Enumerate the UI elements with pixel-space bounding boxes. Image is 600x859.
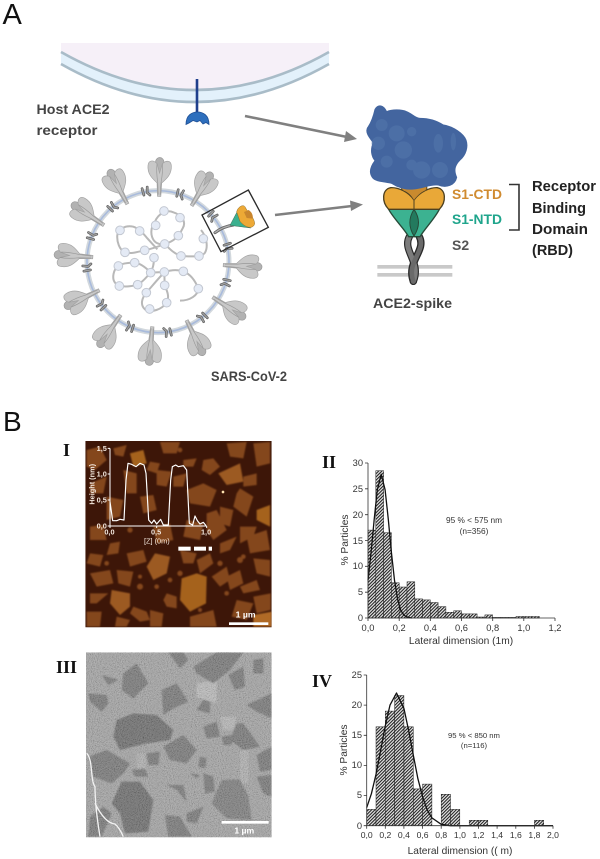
arrow: virus to spike bbox=[275, 200, 363, 215]
inset axis labels: 0,0 bbox=[104, 527, 115, 536]
inset height profile axes bbox=[108, 448, 207, 528]
x axis values: 0,2 bbox=[379, 830, 391, 840]
label: Receptor Binding Domain (RBD): Receptor bbox=[532, 178, 596, 195]
label: ACE2-spike: ACE2-spike bbox=[373, 295, 452, 311]
x axis values: 1,2 bbox=[549, 623, 561, 633]
membrane proteins bbox=[83, 187, 232, 337]
label: host ACE2 receptor bbox=[36, 101, 110, 138]
gaussian fit curve bbox=[367, 693, 553, 826]
scale bar: 1 µm bbox=[234, 826, 255, 836]
scale bar: 1 µm bbox=[236, 609, 256, 619]
panel III: electron microscopy image bbox=[86, 652, 272, 837]
annotation: (n=356) bbox=[460, 526, 489, 536]
x axis values: 0,8 bbox=[486, 623, 499, 633]
inset axis labels: 0,5 bbox=[151, 527, 161, 536]
label IV: IV bbox=[312, 671, 332, 691]
annotation bbox=[448, 731, 500, 750]
annotation: 95 % < 850 nm bbox=[448, 731, 500, 740]
y axis values: 15 bbox=[353, 536, 363, 546]
x axis values: 1,4 bbox=[491, 830, 503, 840]
domain labels: S1-NTD bbox=[452, 211, 502, 227]
x axis values: 0,6 bbox=[417, 830, 429, 840]
y axis values: 15 bbox=[352, 730, 362, 740]
x axis values: 2,0 bbox=[547, 830, 559, 840]
SARS-CoV-2 virus illustration bbox=[53, 157, 268, 366]
bracket for receptor binding domain bbox=[509, 184, 519, 230]
label II: II bbox=[322, 452, 336, 472]
y axis values bbox=[353, 458, 363, 623]
RNA nucleoprotein beads bbox=[114, 207, 208, 313]
y axis title: % Particles bbox=[340, 515, 351, 565]
histogram bars bbox=[367, 696, 544, 826]
label: SARS-CoV-2: SARS-CoV-2 bbox=[211, 368, 287, 384]
label I: I bbox=[63, 440, 70, 460]
chart IV: lateral dimension histogram bbox=[339, 670, 559, 857]
x axis values: 1,8 bbox=[528, 830, 541, 840]
S1-CTD domain bbox=[384, 185, 444, 209]
label: host ACE2 receptor: receptor bbox=[36, 122, 98, 138]
SEM micrograph bbox=[86, 652, 272, 837]
label: Receptor Binding Domain (RBD): Domain bbox=[532, 221, 588, 238]
S1-NTD domain bbox=[389, 209, 439, 237]
inset axis labels: 1,5 bbox=[97, 444, 107, 453]
x axis values: 0,0 bbox=[361, 830, 373, 840]
y axis title: % Particles bbox=[339, 725, 350, 775]
inset axis labels: 1,0 bbox=[97, 470, 107, 479]
x axis values: 1,0 bbox=[517, 623, 530, 633]
inset axis labels: 1,0 bbox=[201, 527, 211, 536]
inset height profile curve bbox=[110, 463, 206, 526]
x axis values: 0,4 bbox=[424, 623, 437, 633]
S2 twisted stalk bbox=[408, 237, 421, 281]
gaussian fit curve bbox=[368, 474, 412, 618]
dashed white scan line bbox=[178, 547, 212, 551]
y axis values: 0 bbox=[357, 821, 362, 831]
scale bar bbox=[222, 821, 269, 836]
x axis values bbox=[361, 830, 559, 840]
y axis values: 10 bbox=[352, 760, 362, 770]
x axis values: 0,8 bbox=[435, 830, 447, 840]
surface spike proteins bbox=[53, 157, 263, 366]
RNA genome strand bbox=[113, 211, 207, 311]
ACE2-spike complex illustration bbox=[367, 106, 467, 281]
inset axis labels: 0,0 bbox=[97, 521, 107, 530]
icon: ACE2 receptor on membrane bbox=[186, 79, 209, 124]
inset axis labels: 0,5 bbox=[97, 496, 107, 505]
y axis values: 5 bbox=[358, 587, 363, 597]
y axis values: 20 bbox=[352, 700, 362, 710]
arrow: receptor to complex bbox=[245, 116, 357, 142]
x axis values: 1,6 bbox=[510, 830, 522, 840]
histogram bars bbox=[368, 471, 539, 618]
annotation bbox=[446, 515, 502, 536]
annotation: (n=116) bbox=[461, 741, 488, 750]
x axis values: 1,0 bbox=[454, 830, 466, 840]
domain labels: S2 bbox=[452, 237, 469, 253]
panel letter B: B bbox=[3, 406, 22, 437]
x axis values: 0,6 bbox=[455, 623, 468, 633]
label III: III bbox=[56, 657, 77, 677]
inset axis labels bbox=[87, 444, 211, 545]
label: Receptor Binding Domain (RBD): Binding bbox=[532, 200, 586, 217]
x axis values bbox=[362, 623, 561, 633]
axes bbox=[365, 463, 555, 621]
label: host ACE2 receptor: Host ACE2 bbox=[36, 101, 110, 117]
y axis values: 25 bbox=[353, 484, 363, 494]
domain labels: S1-CTD bbox=[452, 186, 502, 202]
x axis values: 0,2 bbox=[393, 623, 406, 633]
label: Receptor Binding Domain (RBD) bbox=[532, 178, 596, 259]
y axis values: 5 bbox=[357, 790, 362, 800]
x axis values: 0,0 bbox=[362, 623, 374, 633]
ACE2 protein surface bbox=[367, 106, 467, 189]
inset axis labels: [Z] (0m) bbox=[144, 536, 170, 545]
x axis title: Lateral dimension (1m) bbox=[409, 636, 513, 647]
y axis values bbox=[352, 670, 362, 831]
membrane bars bbox=[377, 265, 452, 277]
y axis values: 25 bbox=[352, 670, 362, 680]
x axis title: Lateral dimension (( m) bbox=[408, 846, 512, 857]
chart II: lateral dimension histogram bbox=[340, 458, 561, 647]
annotation: 95 % < 575 nm bbox=[446, 515, 502, 525]
x axis values: 1,2 bbox=[473, 830, 485, 840]
y axis values: 30 bbox=[353, 458, 363, 468]
label: Receptor Binding Domain (RBD): (RBD) bbox=[532, 242, 573, 259]
y axis values: 0 bbox=[358, 613, 363, 623]
host cell membrane bbox=[61, 43, 329, 102]
y axis values: 20 bbox=[353, 510, 363, 520]
x axis values: 0,4 bbox=[398, 830, 410, 840]
axes bbox=[364, 675, 553, 829]
AFM height map bbox=[85, 441, 272, 627]
panel I: AFM image with height profile bbox=[85, 441, 272, 627]
inset axis labels: Height (nm) bbox=[87, 463, 96, 505]
scale bar bbox=[229, 609, 268, 625]
domain labels bbox=[452, 186, 502, 253]
virus envelope ring bbox=[87, 191, 229, 333]
y axis values: 10 bbox=[353, 561, 363, 571]
highlighted spike with box bbox=[202, 190, 268, 252]
